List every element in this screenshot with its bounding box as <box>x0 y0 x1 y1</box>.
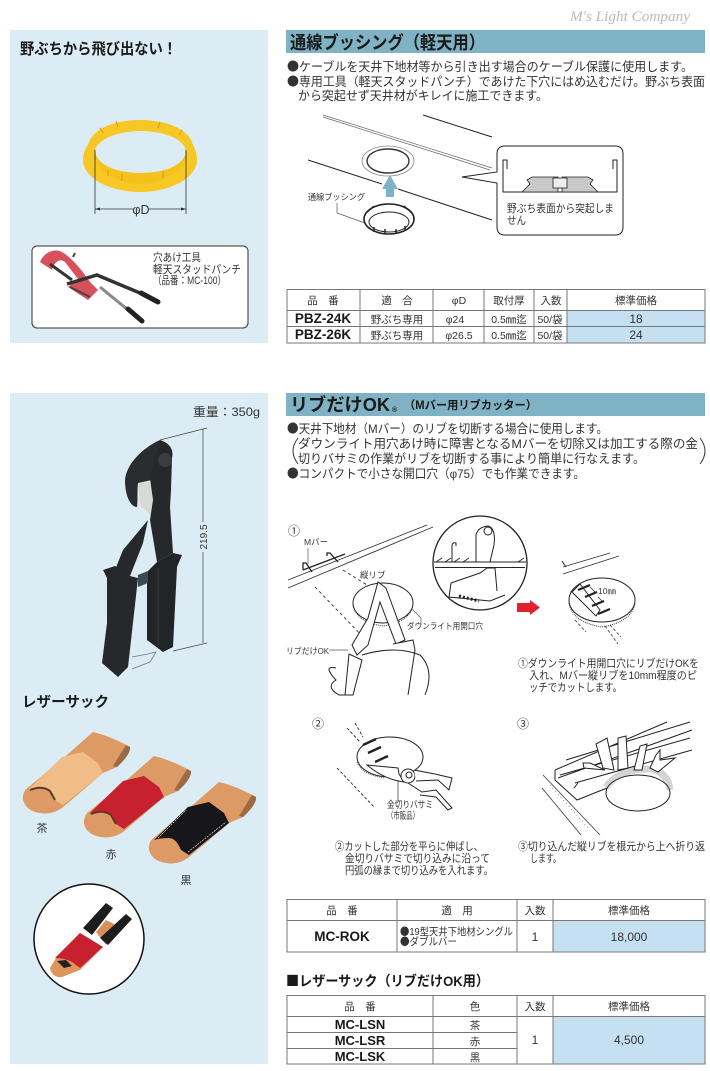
inset: detail circle <box>433 516 527 610</box>
table: rib cutter pricing: ●ダブルバー <box>400 934 457 949</box>
table: rib cutter pricing: 適 用 <box>441 904 473 917</box>
text block: bushing description: ●専用工具（軽天スタッドパンチ）であけた下穴にはめ込むだけ。野ぶち表面 <box>287 72 705 90</box>
label: punch tool: 穴あけ工具 <box>153 251 201 264</box>
label: punch tool: （品番：MC-100） <box>153 274 226 287</box>
ceiling board <box>288 525 433 588</box>
label: brown: 茶 <box>36 821 48 835</box>
callout: punch tool <box>32 246 248 328</box>
table: leather sack pricing: 1 <box>532 1033 539 1047</box>
heading: does not protrude: 野ぶちから飛び出ない！ <box>20 40 177 58</box>
table: bushing pricing <box>287 289 705 343</box>
table: bushing pricing: 50/袋 <box>537 313 563 326</box>
table: bushing pricing: 適 合 <box>381 294 413 307</box>
text block: rib cutter description: 切りバサミの作業がリブを切断する事により簡単に行なえます。 <box>298 451 645 466</box>
label: red: 赤 <box>106 848 116 861</box>
label: punch tool: 軽天スタッドパンチ <box>153 263 241 276</box>
header: rib cutter: （Mバー用リブカッター） <box>404 398 537 412</box>
table: bushing pricing: 50/袋 <box>537 329 563 342</box>
header: bushing: 通線ブッシング（軽天用） <box>290 32 485 53</box>
diagram: step 3 folded ribs: ③ <box>517 715 529 732</box>
table: bushing pricing: PBZ-24K <box>295 311 351 326</box>
table: leather sack pricing <box>287 995 705 1064</box>
header: rib cutter <box>286 393 705 416</box>
table: bushing pricing: 野ぶち専用 <box>371 314 423 326</box>
label: black: 黒 <box>180 874 192 887</box>
diagram: step 3 folded ribs <box>517 715 692 835</box>
table: bushing pricing: φ26.5 <box>445 330 473 342</box>
table: leather sack pricing: 赤 <box>470 1036 481 1048</box>
caption: step 2: 金切りバサミで切り込みに沿って <box>345 852 490 865</box>
panel: rib cutter product <box>10 393 268 1064</box>
table: leather sack pricing: 色 <box>470 1001 481 1013</box>
table: rib cutter pricing <box>287 899 705 952</box>
diagram: step 1 cutting ribs: リブだけOK <box>286 646 329 656</box>
caption: step 2: ②カットした部分を平らに伸ばし、 <box>335 838 483 854</box>
table: rib cutter pricing: 入数 <box>524 904 546 917</box>
table: bushing pricing: 標準価格 <box>615 294 657 307</box>
heading: leather sack: レザーサック <box>22 694 109 711</box>
table: bushing pricing: PBZ-26K <box>295 327 351 342</box>
caption: step 2 <box>335 838 493 877</box>
diagram: bushing installation <box>308 115 623 235</box>
text block: rib cutter description: ダウンライト用穴あけ時に障害となるMバーを切除又は加工する際の金 <box>298 436 698 451</box>
diagram: cut ribs: 10㎜ <box>598 586 616 596</box>
dimension: 219.5: 219.5 <box>199 524 210 550</box>
table: bushing pricing: 品 番 <box>307 295 339 307</box>
text block: rib cutter description: ●天井下地材（Mバー）のリブを切断する場合に使用します。 <box>287 419 608 437</box>
diagram: step 1 cutting ribs: ダウンライト用開口穴 <box>407 621 483 631</box>
diagram: step 1 cutting ribs <box>286 516 699 695</box>
text block: bushing description: から突起せず天井材がキレイに施工できます。 <box>298 88 548 103</box>
callout: section view: 野ぶち表面から突起しま <box>507 202 614 215</box>
diagram: step 2 scissors: （市販品） <box>387 810 419 822</box>
arrow: next step <box>517 600 540 615</box>
table: leather sack pricing: MC-LSN <box>335 1017 385 1032</box>
table: leather sack pricing: 入数 <box>524 1000 546 1013</box>
table: leather sack pricing: MC-LSK <box>335 1049 386 1064</box>
opening <box>353 583 413 623</box>
watermark: M's Light Company <box>569 9 690 25</box>
table: leather sack pricing: MC-LSR <box>335 1033 386 1048</box>
arrow: insert upward <box>382 175 398 197</box>
text block: bushing description <box>287 57 705 103</box>
table: leather sack pricing: 4,500 <box>614 1033 644 1047</box>
table: bushing pricing: φ24 <box>446 314 464 326</box>
caption: step 3: します。 <box>530 852 561 865</box>
table: leather sack pricing: 茶 <box>470 1019 481 1032</box>
callout: section view: せん <box>507 214 526 227</box>
dimension: 219.5 <box>160 428 210 651</box>
M-bar ribs <box>303 553 345 572</box>
diagram: step 2 scissors: 金切りバサミ <box>387 799 433 811</box>
table: leather sack pricing: 品 番 <box>344 1001 376 1013</box>
inset: cutter stored in sack <box>34 884 144 994</box>
table: rib cutter pricing: MC-ROK <box>314 929 370 944</box>
table: bushing pricing: 18 <box>629 312 643 326</box>
table: rib cutter pricing: ●19型天井下地材シングル <box>400 924 513 939</box>
diagram: step 1 cutting ribs: Mバー <box>304 537 328 547</box>
table: bushing pricing: 24 <box>629 328 643 342</box>
table: bushing pricing: φD <box>452 295 467 307</box>
table: leather sack pricing: 標準価格 <box>608 1000 650 1013</box>
caption: step 1: ッチでカットします。 <box>529 681 622 694</box>
tool and hand <box>352 582 405 655</box>
diagram: cut ribs <box>562 553 635 644</box>
table: rib cutter pricing: 1 <box>532 930 539 944</box>
table: bushing pricing: 0.5㎜迄 <box>491 329 527 342</box>
diagram: step 1 cutting ribs: 縦リブ <box>360 570 386 580</box>
dimension: phi D <box>95 150 186 217</box>
heading: leather sack table: ■レザーサック（リブだけOK用） <box>286 971 489 991</box>
table: rib cutter pricing: 標準価格 <box>608 904 650 917</box>
icon: yellow bushing ring <box>83 120 197 192</box>
panel: bushing product <box>10 30 268 343</box>
table: bushing pricing: 0.5㎜迄 <box>491 313 527 326</box>
label: bushing: 通線ブッシング <box>308 191 365 202</box>
diagram: step 2 scissors <box>312 715 452 822</box>
header: bushing <box>286 30 705 53</box>
caption: step 1 <box>518 655 699 694</box>
icon: small bushing <box>364 204 414 234</box>
table: rib cutter pricing: 18,000 <box>611 930 648 944</box>
text block: rib cutter description: ●コンパクトで小さな開口穴（φ75）でも作業できます。 <box>287 464 585 482</box>
dashed edges <box>315 570 375 638</box>
icon: red sack <box>84 756 191 837</box>
caption: step 1: 入れ、Mバー縦リブを10mm程度のピ <box>529 668 697 682</box>
label: punch tool <box>153 251 241 287</box>
dimension: phi D: φD <box>132 203 150 217</box>
diagram: step 2 scissors: ② <box>312 715 324 732</box>
diagram: step 1 cutting ribs: ① <box>288 522 300 539</box>
table: bushing pricing: 取付厚 <box>493 294 525 307</box>
icon: brown sack <box>23 732 130 813</box>
callout: section view <box>462 146 623 235</box>
icon: black sack <box>149 782 256 863</box>
table: leather sack pricing: 黒 <box>470 1052 480 1064</box>
text: weight: 重量：350g <box>193 405 260 419</box>
table: bushing pricing: 野ぶち専用 <box>371 330 423 342</box>
header: rib cutter: ® <box>392 406 398 414</box>
table: rib cutter pricing: 品 番 <box>326 905 358 917</box>
text block: rib cutter description <box>287 419 705 482</box>
text block: bushing description: ●ケーブルを天井下地材等から引き出す場合のケーブル保護に使用します。 <box>287 57 693 75</box>
caption: step 3 <box>518 838 705 865</box>
icon: rib cutter tool <box>102 440 182 677</box>
caption: step 2: 円弧の縁まで切り込みを入れます。 <box>345 863 493 877</box>
header: rib cutter: リブだけOK <box>290 394 390 415</box>
icon: stud punch tool <box>40 250 158 321</box>
table: bushing pricing: 入数 <box>540 294 562 307</box>
